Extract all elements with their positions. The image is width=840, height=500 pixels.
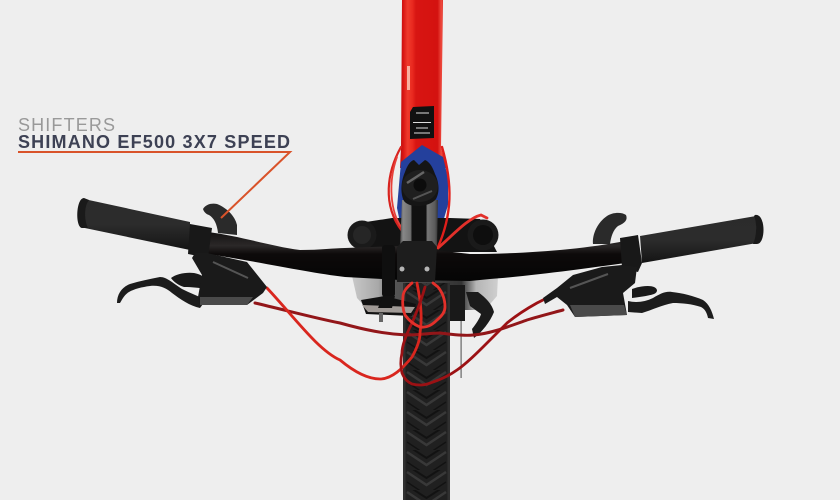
grip body (640, 216, 757, 263)
tube gloss (407, 66, 410, 90)
grip end cap (753, 215, 764, 244)
collar (188, 224, 212, 258)
body (543, 265, 637, 317)
right brake arm (466, 292, 494, 338)
leader line (18, 152, 290, 218)
gear display (570, 274, 608, 288)
upper lever (171, 273, 208, 289)
left grip (77, 198, 212, 258)
handlebar (208, 232, 625, 281)
bar ends behind stem (348, 218, 498, 252)
body (192, 253, 267, 305)
grip end cap (77, 198, 89, 228)
lower brake cables (255, 283, 563, 385)
stem (400, 160, 439, 247)
right grip (620, 215, 764, 272)
body underside (570, 305, 627, 317)
right shifter and brake lever (543, 265, 714, 319)
brake parts (361, 285, 494, 378)
main lever (117, 277, 206, 308)
callout (18, 115, 290, 218)
red tube (400, 0, 447, 168)
stem clamp (378, 241, 437, 308)
main lever (628, 292, 714, 319)
frame tube (397, 0, 448, 232)
gear display (213, 262, 248, 278)
tire (403, 283, 450, 500)
body underside (200, 297, 253, 305)
left shifter paddle (203, 204, 237, 235)
fender and brake arch (352, 276, 498, 310)
right shifter paddle (593, 213, 627, 244)
upper brake cables (389, 147, 487, 248)
upper lever (632, 286, 657, 298)
label: shimano ef500 3x7 speed: SHIMANO EF500 3X7 SPEED (18, 132, 290, 152)
label: shifters: SHIFTERS (18, 115, 115, 135)
left brake pad (361, 296, 416, 316)
blue chevron section (397, 145, 448, 232)
collar (620, 235, 642, 272)
left shifter and brake lever (117, 253, 267, 308)
sticker (410, 106, 434, 139)
grip body (80, 199, 190, 250)
